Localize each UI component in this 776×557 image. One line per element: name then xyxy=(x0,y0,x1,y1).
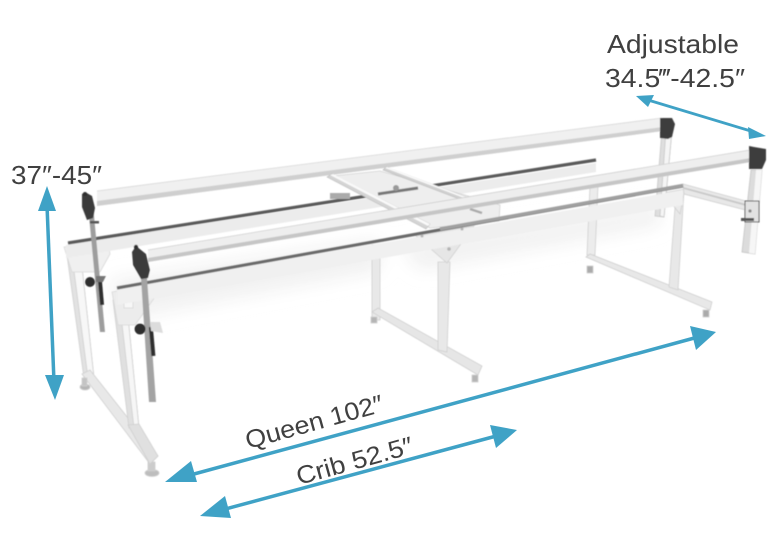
label: adjustable range: 34.5‴-42.5″ xyxy=(605,63,745,93)
front white rail xyxy=(148,150,751,262)
dimension arrow: queen length xyxy=(165,326,716,482)
table centre bracket xyxy=(415,226,474,263)
rear upright xyxy=(655,130,672,217)
carriage xyxy=(327,167,500,229)
table front-left leg xyxy=(113,296,159,476)
back top rail xyxy=(97,118,663,206)
quilting frame xyxy=(64,118,766,476)
soft floor shadows xyxy=(110,205,660,320)
label: height range: 37″-45″ xyxy=(11,160,102,190)
left rear upright and crank xyxy=(82,192,106,332)
left front upright and crank xyxy=(132,245,163,402)
table back-left leg xyxy=(66,248,158,464)
label: crib length: Crib 52.5″ xyxy=(293,432,416,491)
right end upright xyxy=(741,170,762,254)
table left corner plates xyxy=(64,241,160,325)
label: queen length: Queen 102″ xyxy=(242,390,387,455)
rear right crank head xyxy=(660,118,675,139)
front dark rail xyxy=(117,186,683,305)
dimension arrow: crib length xyxy=(200,425,517,518)
dimension arrow: height xyxy=(38,186,64,400)
bracket hardware xyxy=(420,228,464,251)
label: adjustable: Adjustable xyxy=(607,29,739,59)
table centre legs xyxy=(371,245,482,382)
dimension arrow: adjustable width xyxy=(636,95,766,139)
table right legs xyxy=(586,185,712,317)
rear tabletop band and dark rail xyxy=(66,160,596,258)
right arm xyxy=(683,184,757,213)
front right crank head xyxy=(749,146,766,169)
